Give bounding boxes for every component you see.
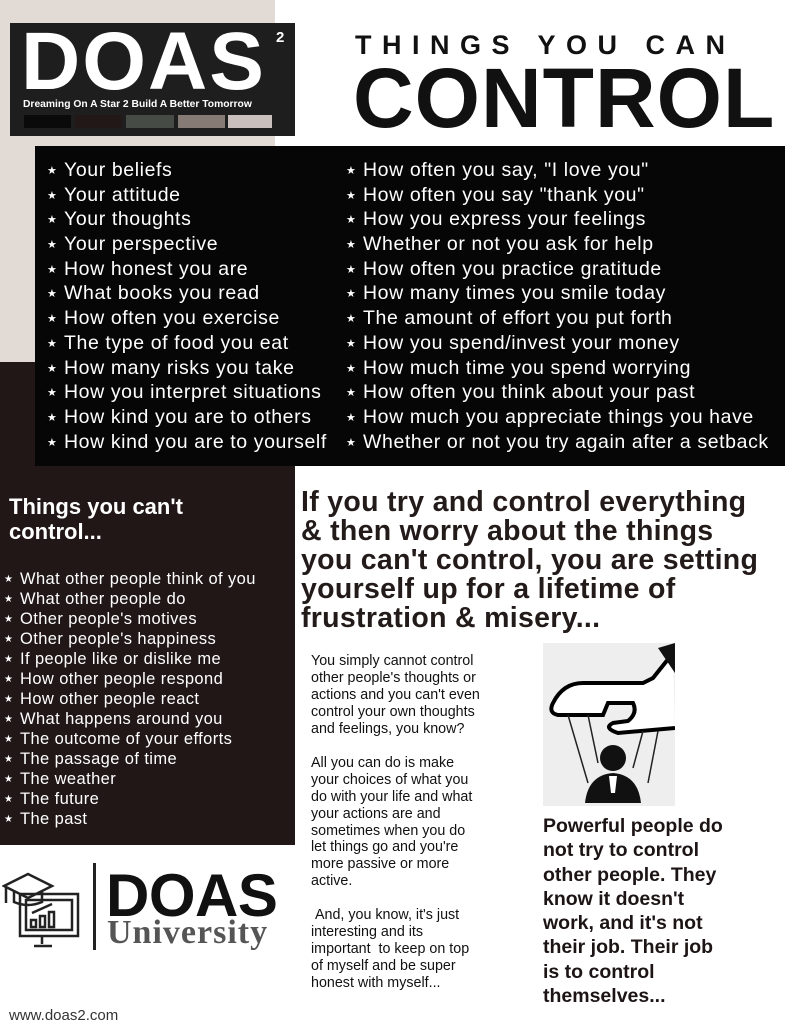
logo: DOAS2: DOAS (21, 16, 266, 107)
quote heading: If you try and control everything (301, 486, 746, 518)
logo: DOAS2 (10, 23, 295, 136)
quote heading (301, 486, 758, 634)
text block: paragraph: more passive or more (311, 856, 449, 872)
list: can't control: Other people's happiness (20, 630, 216, 648)
list: right column: How much you appreciate things you have (363, 406, 754, 428)
list: right column: How much time you spend worrying (363, 356, 691, 378)
text block: paragraph: You simply cannot control (311, 653, 473, 669)
list: can't control (4, 570, 256, 828)
list: right column: Whether or not you try again after a setback (363, 431, 769, 453)
text block: paragraph: your actions are and (311, 806, 441, 822)
list: right column: How often you practice gratitude (363, 258, 662, 280)
text block: paragraph: interesting and its (311, 924, 423, 940)
quote heading: & then worry about the things (301, 515, 713, 547)
text block: paragraph: actions and you can't even (311, 687, 480, 703)
list: can't control: The outcome of your efforts (20, 730, 232, 748)
quote heading: frustration & misery... (301, 602, 600, 634)
text block: paragraph: sometimes when you do (311, 823, 465, 839)
title: CONTROL (353, 51, 775, 145)
heading: things you can't control: control... (9, 519, 102, 544)
list: left column: How kind you are to others (64, 406, 312, 428)
text block: powerful people: other people. They (543, 864, 716, 886)
list: left column: Your thoughts (64, 208, 191, 230)
logo: DOAS University: DOAS (106, 862, 277, 929)
list: right column: The amount of effort you put forth (363, 307, 672, 329)
logo: DOAS University (2, 862, 277, 951)
list: left column: How honest you are (64, 258, 248, 280)
list: can't control: The weather (20, 770, 116, 788)
logo: DOAS2: Dreaming On A Star 2 Build A Better Tomorrow (23, 99, 252, 110)
icon: puppet hand (543, 643, 675, 806)
text block: powerful people: themselves... (543, 985, 665, 1007)
list: can't control: What other people do (20, 590, 186, 608)
text block: powerful people (543, 815, 723, 1007)
list: can't control: If people like or dislike me (20, 650, 221, 668)
text block: paragraph: All you can do is make (311, 755, 454, 771)
list: left column: How kind you are to yourself (64, 431, 327, 453)
list: right column: Whether or not you ask for help (363, 233, 654, 255)
list: left column (48, 159, 327, 453)
list: left column: Your beliefs (64, 159, 172, 181)
list: right column: How many times you smile today (363, 282, 666, 304)
list: can't control: What other people think of you (20, 570, 256, 588)
text block: paragraph (311, 653, 480, 991)
icon: graduation monitor (2, 872, 80, 948)
text block: paragraph: And, you know, it's just (315, 907, 459, 923)
text block: paragraph: control your own thoughts (311, 704, 475, 720)
list: left column: Your perspective (64, 233, 218, 255)
heading: things you can't control: Things you can't (9, 494, 183, 519)
text block: paragraph: your choices of what you (311, 772, 468, 788)
quote heading: you can't control, you are setting (301, 544, 758, 576)
list: can't control: How other people react (20, 690, 199, 708)
text block: paragraph: other people's thoughts or (311, 670, 476, 686)
list: left column: Your attitude (64, 184, 181, 206)
text block: paragraph: and feelings, you know? (311, 721, 464, 737)
list: right column: How often you think about your past (363, 381, 695, 403)
list: can't control: The past (20, 810, 87, 828)
text block: paragraph: honest with myself... (311, 975, 441, 991)
text block: paragraph: important to keep on top (311, 941, 469, 957)
logo: DOAS2: 2 (276, 29, 284, 46)
text block: paragraph: do with your life and what (311, 789, 472, 805)
list: can't control: Other people's motives (20, 610, 197, 628)
list: left column: How often you exercise (64, 307, 280, 329)
title: THINGS YOU CAN (355, 30, 736, 60)
list: right column: How you express your feelings (363, 208, 646, 230)
text block: powerful people: Powerful people do (543, 815, 723, 837)
list: can't control: What happens around you (20, 710, 223, 728)
text block: paragraph: of myself and be super (311, 958, 456, 974)
list: right column: How often you say, "I love you" (363, 159, 649, 181)
text block: powerful people: know it doesn't (543, 888, 684, 910)
logo: DOAS University: University (107, 914, 268, 951)
list: left column: What books you read (64, 282, 260, 304)
list: left column: The type of food you eat (64, 332, 289, 354)
list: right column (346, 159, 769, 453)
list: right column: How you spend/invest your money (363, 332, 680, 354)
text block: paragraph: active. (311, 873, 352, 889)
list: can't control: The future (20, 790, 99, 808)
list: left column: How you interpret situations (64, 381, 321, 403)
heading: things you can't control (9, 494, 183, 544)
text block: powerful people: their job. Their job (543, 936, 713, 958)
footer url: www.doas2.com (9, 1007, 118, 1024)
list: left column: How many risks you take (64, 356, 295, 378)
text block: powerful people: work, and it's not (543, 912, 703, 934)
list: can't control: The passage of time (20, 750, 177, 768)
text block: powerful people: not try to control (543, 839, 699, 861)
quote heading: yourself up for a lifetime of (301, 573, 676, 605)
text block: paragraph: let things go and you're (311, 839, 458, 855)
list: can't control: How other people respond (20, 670, 223, 688)
list: right column: How often you say "thank you" (363, 184, 645, 206)
panel: things you can control (35, 146, 785, 466)
text block: powerful people: is to control (543, 961, 655, 983)
